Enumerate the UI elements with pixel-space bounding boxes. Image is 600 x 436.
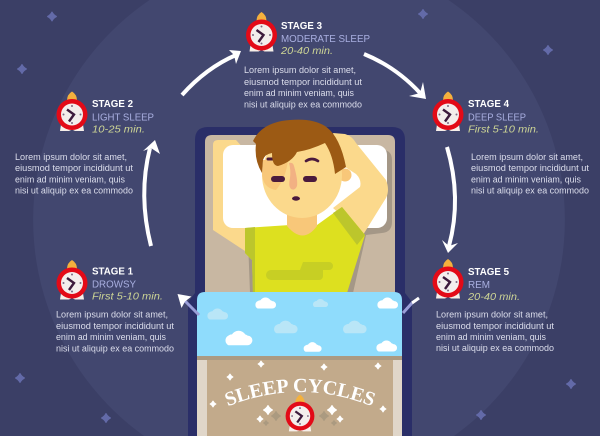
mattress (205, 135, 395, 436)
stage 5 (432, 259, 555, 353)
stage heading (92, 266, 163, 302)
title dark stars (263, 412, 337, 426)
description: Lorem ipsum dolor sit amet, (244, 65, 356, 75)
stage heading: First 5-10 min. (468, 124, 539, 136)
arrow: into stage 1 (178, 294, 199, 315)
stage heading: LIGHT SLEEP (92, 112, 154, 124)
pillow (223, 145, 387, 228)
stage heading: MODERATE SLEEP (281, 33, 370, 45)
description: nisi ut aliquip ex ea commodo (436, 343, 554, 353)
stage heading: DEEP SLEEP (468, 112, 526, 124)
title: sleep cycles: SLEEP CYCLES (225, 378, 376, 406)
light clouds (207, 299, 367, 333)
arrow: stage 1 to 2 (143, 140, 160, 246)
description (436, 310, 555, 353)
stage 1 (56, 260, 175, 354)
right eye (303, 176, 317, 182)
cycle arrows (143, 50, 458, 315)
title stars (210, 361, 386, 422)
description: Lorem ipsum dolor sit amet, (15, 152, 127, 162)
shirt creases (266, 262, 333, 280)
left arm (213, 140, 245, 251)
duvet lower (197, 350, 402, 436)
pillow shadow (226, 150, 392, 293)
description: Lorem ipsum dolor sit amet, (471, 152, 583, 162)
stage heading: STAGE 4 (468, 98, 509, 110)
description: enim ad minim veniam, quis (244, 88, 355, 98)
cheek shade (262, 160, 288, 190)
description (56, 310, 175, 354)
description: eiusmod tempor incididunt ut (244, 77, 363, 87)
clock icon (432, 92, 464, 131)
stage 2 (15, 92, 154, 196)
right arm (333, 133, 388, 235)
description: eiusmod tempor incididunt ut (436, 321, 555, 331)
ear (338, 168, 352, 182)
stage heading: DROWSY (92, 278, 136, 290)
description (471, 152, 590, 196)
bed (188, 127, 412, 436)
nose (289, 163, 297, 190)
neck (287, 213, 317, 236)
description: Lorem ipsum dolor sit amet, (436, 310, 548, 320)
arrow: stage 4 to 5 (442, 147, 458, 253)
mouth (292, 196, 300, 201)
hair (253, 120, 346, 174)
stage heading: REM (468, 279, 490, 291)
arrow: from stage 5 (403, 298, 419, 313)
description: Lorem ipsum dolor sit amet, (56, 310, 168, 320)
description: nisi ut aliquip ex ea commodo (471, 186, 589, 196)
description (15, 152, 134, 196)
shirt sleeves (245, 207, 365, 293)
head (262, 132, 342, 218)
white clouds (225, 297, 398, 352)
duvet blue (197, 292, 402, 356)
stage heading: 20-40 min. (280, 45, 333, 57)
right eyebrow (306, 159, 318, 161)
stage heading: STAGE 3 (281, 20, 322, 32)
stage heading: 10-25 min. (92, 124, 145, 136)
description: enim ad minim veniam, quis (471, 174, 582, 184)
stage heading (92, 98, 154, 136)
stage heading: First 5-10 min. (92, 290, 163, 302)
arrow: stage 3 to 4 (364, 54, 426, 99)
description (244, 65, 363, 110)
title clock (286, 395, 314, 431)
stage heading: 20-40 min. (467, 291, 520, 303)
stage heading: STAGE 2 (92, 98, 133, 110)
description: nisi ut aliquip ex ea commodo (56, 344, 174, 354)
left eyebrow (268, 158, 276, 160)
description: eiusmod tempor incididunt ut (56, 321, 175, 331)
description: eiusmod tempor incididunt ut (471, 163, 590, 173)
shirt (245, 207, 365, 293)
sleeping boy (213, 120, 392, 293)
stage 4 (432, 92, 590, 196)
clock icon (246, 12, 277, 52)
description: enim ad minim veniam, quis (15, 174, 126, 184)
stage 3 (244, 12, 370, 110)
bed frame (188, 127, 412, 436)
stage heading: STAGE 5 (468, 266, 509, 278)
arrow: stage 2 to 3 (182, 50, 241, 95)
stage heading (280, 20, 370, 57)
description: nisi ut aliquip ex ea commodo (244, 100, 362, 110)
duvet fold (197, 356, 402, 360)
stage heading (467, 266, 520, 303)
left eye (271, 176, 285, 182)
clock icon (56, 260, 88, 300)
duvet (197, 292, 402, 436)
stage heading: STAGE 1 (92, 266, 133, 278)
description: nisi ut aliquip ex ea commodo (15, 186, 133, 196)
description: eiusmod tempor incididunt ut (15, 163, 134, 173)
clock icon (432, 259, 464, 298)
stage heading (468, 98, 539, 136)
clock icon (56, 92, 88, 131)
description: enim ad minim veniam, quis (56, 332, 167, 342)
description: enim ad minim veniam, quis (436, 332, 547, 342)
